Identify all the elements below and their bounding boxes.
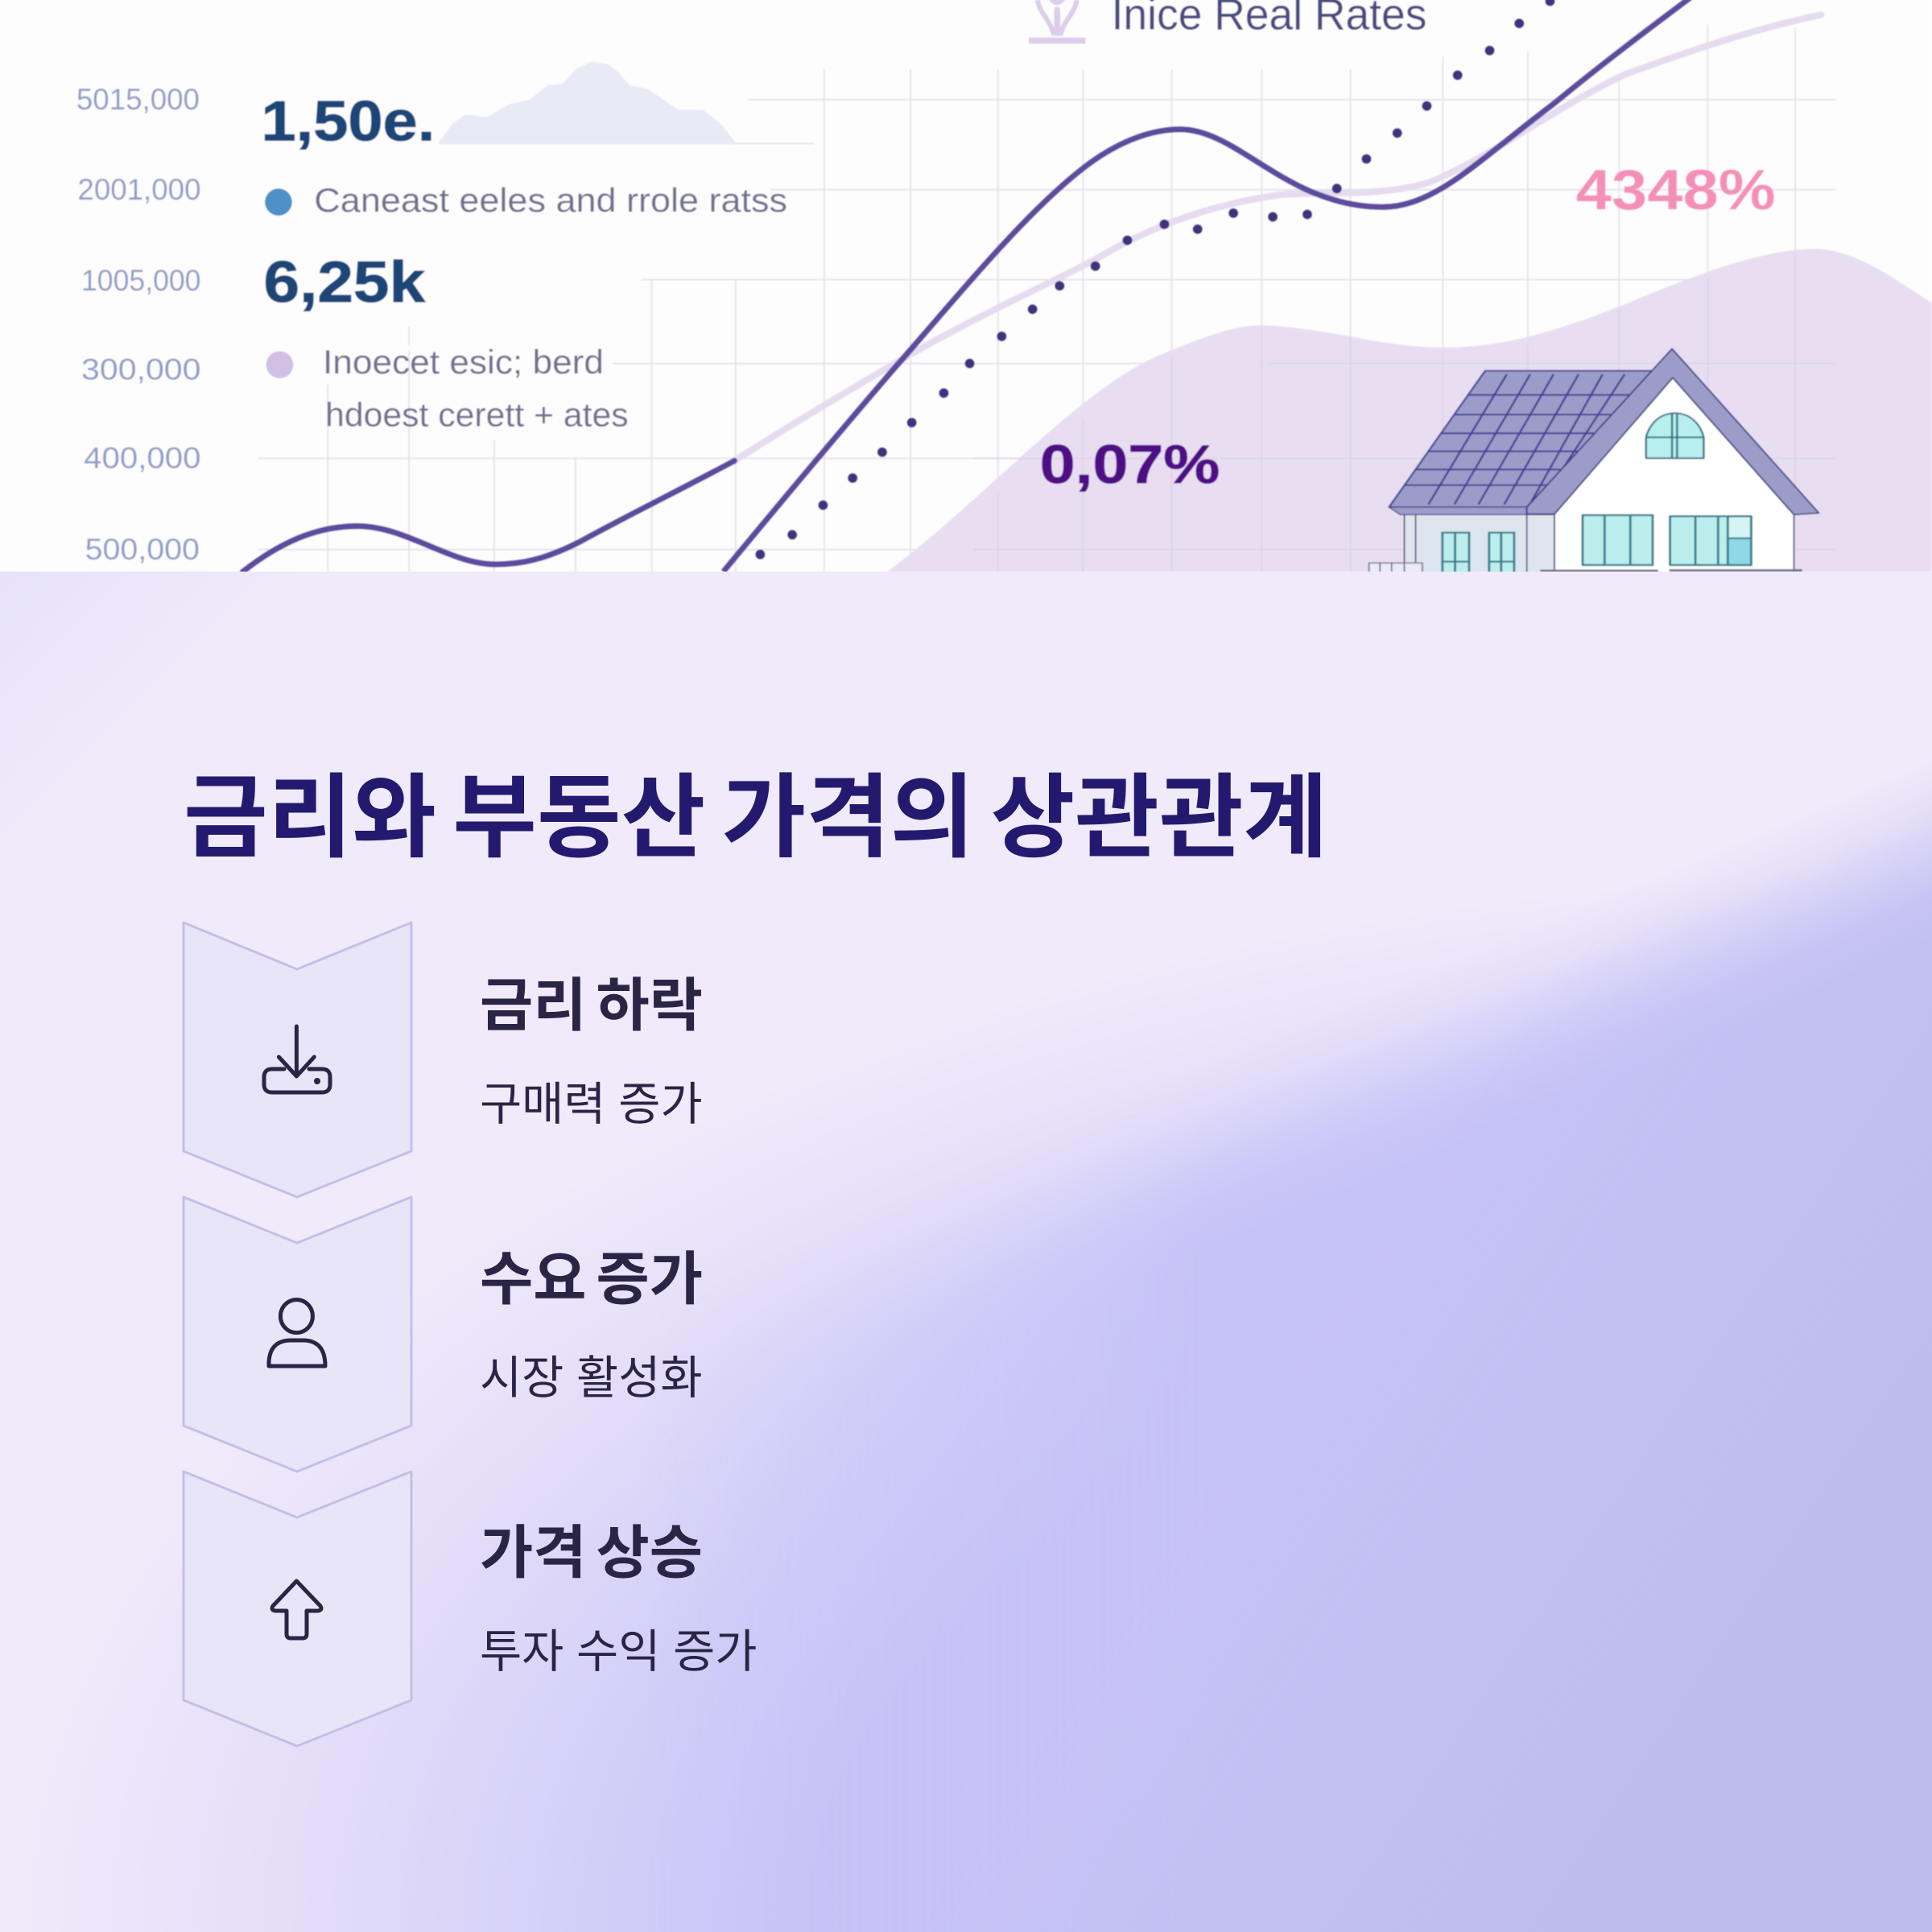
step 2 text: 시장 활성화 bbox=[480, 1353, 703, 1404]
dark line: second segment bbox=[723, 0, 1690, 572]
step 3 chevron bbox=[184, 1472, 411, 1746]
left roof plane bbox=[1389, 371, 1653, 507]
y axis labels: 400,000 bbox=[84, 442, 200, 475]
legend row: lilac dot and two line label: hdoest cerett + ates bbox=[325, 397, 629, 434]
dotted line bbox=[755, 0, 1555, 559]
white gable wall bbox=[1554, 377, 1794, 579]
gable roof band bbox=[1527, 349, 1819, 514]
big stat: 1,50e.: 1,50e. bbox=[261, 89, 435, 152]
panel: top chart image bbox=[0, 0, 1932, 581]
y axis labels: 500,000 bbox=[85, 533, 200, 566]
porch railing bbox=[1369, 563, 1422, 579]
legend row: lilac dot and two line label: Inoecet esic; berd bbox=[323, 344, 604, 381]
roof tiles bbox=[1405, 374, 1630, 505]
icon: up arrow bbox=[272, 1581, 321, 1638]
callout: 4348%: 4348% bbox=[1576, 158, 1776, 221]
step 2: demand increase bbox=[184, 1197, 703, 1472]
arched attic window bbox=[1646, 413, 1703, 458]
y axis labels: 2001,000 bbox=[77, 173, 200, 206]
legend row: blue dot and label bbox=[264, 187, 787, 217]
icon: download tray bbox=[264, 1026, 330, 1092]
left wall bbox=[1405, 514, 1554, 579]
panel: lavender background bbox=[0, 572, 1932, 1932]
legend row: blue dot and label: Caneast eeles and rrole ratss bbox=[314, 182, 787, 219]
left small windows bbox=[1443, 533, 1514, 581]
decorative cloud shape bbox=[440, 63, 734, 143]
step 2 heading: 수요 증가 bbox=[480, 1248, 703, 1312]
callout: 0,07%: 0,07% bbox=[1040, 435, 1220, 495]
step 1: rate decline bbox=[184, 923, 703, 1197]
step 1 chevron bbox=[184, 923, 411, 1197]
y axis labels: 300,000 bbox=[81, 353, 200, 386]
legend row: lilac dot and two line label bbox=[266, 348, 628, 427]
dark line: first segment bbox=[243, 460, 734, 572]
step 1 heading: 금리 하락 bbox=[480, 974, 703, 1038]
chart gridlines bbox=[258, 25, 1836, 572]
illustration: house bbox=[1369, 349, 1819, 581]
area chart: lilac background area bbox=[887, 249, 1932, 572]
big stat: 6,25k: 6,25k bbox=[264, 250, 426, 315]
y axis labels: 5015,000 bbox=[76, 83, 200, 116]
light trend line bbox=[734, 14, 1821, 460]
step 3: price rise bbox=[184, 1472, 757, 1746]
balcony rails bbox=[1540, 567, 1802, 575]
step 2 chevron bbox=[184, 1197, 411, 1472]
gridlines over area bbox=[973, 253, 1836, 572]
y axis labels bbox=[76, 83, 200, 566]
step 1 text: 구매력 증가 bbox=[480, 1080, 703, 1130]
roof eave bbox=[1389, 507, 1529, 514]
step 3 heading: 가격 상승 bbox=[480, 1521, 703, 1586]
y axis labels: 1005,000 bbox=[81, 264, 200, 297]
step 3 text: 투자 수익 증가 bbox=[480, 1627, 757, 1678]
icon: pin legend marker bbox=[1029, 0, 1085, 41]
icon: person bbox=[269, 1299, 325, 1366]
title: 금리와 부동산 가격의 상관관계 bbox=[184, 767, 1327, 869]
lower right windows bbox=[1583, 515, 1751, 565]
